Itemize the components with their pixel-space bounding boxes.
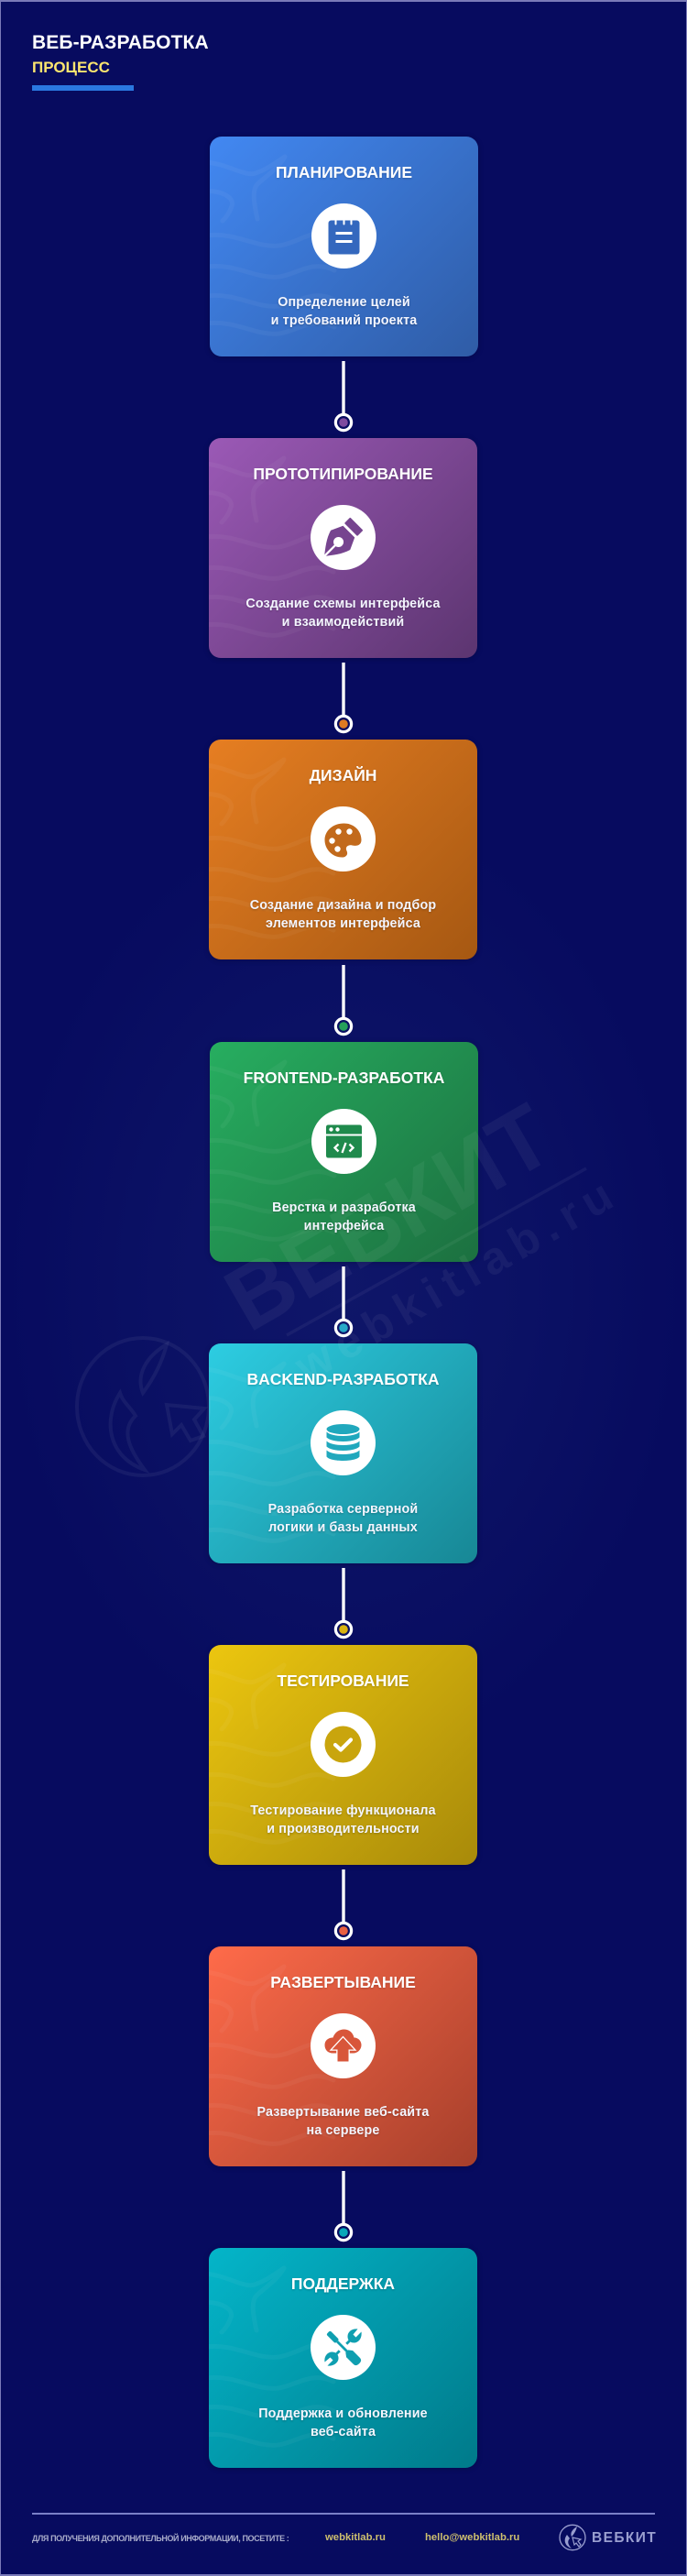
description <box>256 2105 430 2139</box>
description: на сервере <box>307 2123 379 2138</box>
description: Разработка серверной <box>268 1502 418 1517</box>
connector 1 <box>333 361 354 433</box>
footer logo word: ВЕБКИТ <box>592 2530 657 2546</box>
icon: notepad <box>311 203 376 269</box>
description <box>272 1200 416 1233</box>
panel: frontend <box>210 1042 478 1262</box>
description: Поддержка и обновление <box>258 2406 428 2421</box>
connector 3 <box>333 965 354 1036</box>
heading: ТЕСТИРОВАНИЕ <box>277 1672 409 1690</box>
description: и производительности <box>267 1822 420 1836</box>
description: элементов интерфейса <box>266 916 420 931</box>
title: ВЕБ-РАЗРАБОТКА <box>32 32 209 53</box>
panel: testing <box>209 1645 477 1865</box>
footer <box>32 2513 657 2551</box>
heading: ДИЗАЙН <box>310 766 376 784</box>
watermark <box>75 1084 621 1477</box>
description: Создание дизайна и подбор <box>250 898 436 913</box>
footer logo mark <box>559 2524 586 2551</box>
description: и взаимодействий <box>282 615 404 630</box>
title block <box>32 32 209 91</box>
description <box>267 1502 418 1536</box>
description <box>245 597 441 630</box>
footer note: ДЛЯ ПОЛУЧЕНИЯ ДОПОЛНИТЕЛЬНОЙ ИНФОРМАЦИИ, ПОСЕТИТЕ : <box>32 2534 289 2543</box>
icon: check badge <box>311 1712 376 1777</box>
description: Тестирование функционала <box>250 1803 436 1818</box>
heading: РАЗВЕРТЫВАНИЕ <box>270 1973 416 1991</box>
description <box>249 898 436 931</box>
panel: prototyping <box>209 438 477 658</box>
description <box>250 1803 436 1836</box>
description: Развертывание веб-сайта <box>256 2105 429 2120</box>
panel: support <box>209 2248 477 2468</box>
description: интерфейса <box>304 1219 384 1233</box>
website link: webkitlab.ru <box>325 2532 386 2543</box>
heading: FRONTEND-РАЗРАБОТКА <box>244 1069 444 1087</box>
description: веб-сайта <box>311 2425 376 2439</box>
description: и требований проекта <box>271 313 417 328</box>
connector 2 <box>333 663 354 733</box>
email link: hello@webkitlab.ru <box>425 2532 519 2543</box>
heading: ПРОТОТИПИРОВАНИЕ <box>253 465 433 483</box>
connector 6 <box>333 1869 354 1941</box>
panel: deployment <box>209 1946 477 2166</box>
connector 7 <box>333 2171 354 2242</box>
icon: palette <box>311 806 376 871</box>
icon: database <box>311 1410 376 1475</box>
connector 4 <box>333 1266 354 1338</box>
icon: code window <box>311 1109 376 1174</box>
panel: backend <box>209 1343 477 1563</box>
watermark url: webkitlab.ru <box>286 1169 621 1393</box>
description: Создание схемы интерфейса <box>245 597 441 611</box>
panel: planning <box>210 137 478 356</box>
icon: pen nib <box>311 505 376 570</box>
title accent bar <box>32 85 134 91</box>
description <box>271 295 418 328</box>
footer rule <box>32 2513 655 2515</box>
subtitle: ПРОЦЕСС <box>32 59 110 76</box>
description <box>258 2406 428 2439</box>
icon: cloud upload <box>311 2013 376 2078</box>
description: Верстка и разработка <box>272 1200 416 1215</box>
heading: BACKEND-РАЗРАБОТКА <box>246 1370 440 1388</box>
connector 5 <box>333 1568 354 1639</box>
description: логики и базы данных <box>268 1520 418 1535</box>
icon: tools <box>311 2315 376 2380</box>
heading: ПЛАНИРОВАНИЕ <box>276 163 412 181</box>
watermark word: ВЕБКИТ <box>209 1084 568 1350</box>
description: Определение целей <box>278 295 410 310</box>
watermark logo <box>77 1338 209 1475</box>
panel: design <box>209 740 477 959</box>
heading: ПОДДЕРЖКА <box>291 2275 395 2293</box>
